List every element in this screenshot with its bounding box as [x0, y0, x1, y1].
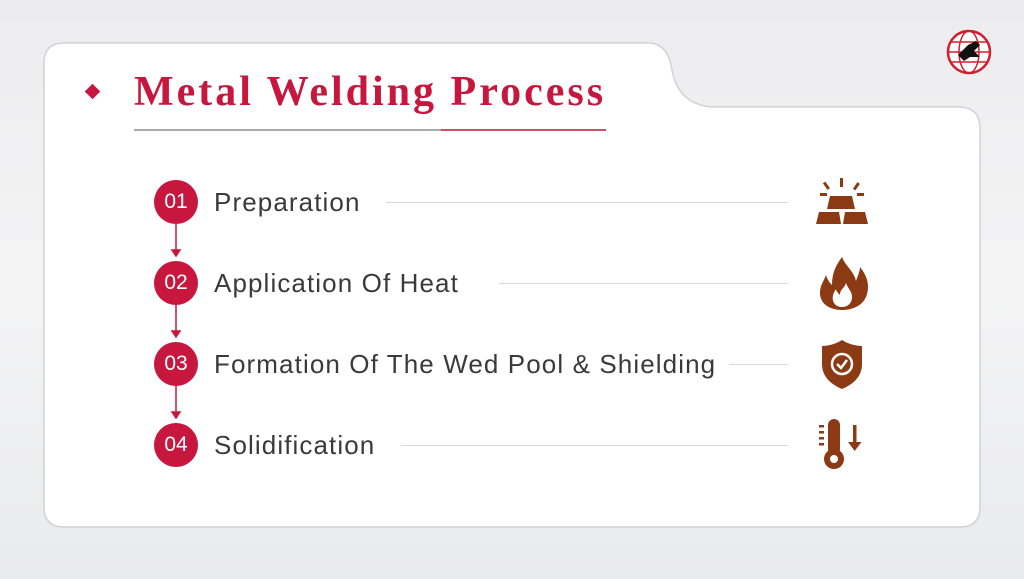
step 01: [154, 180, 788, 224]
icon: diamond bullet: [85, 84, 100, 99]
step 02: [154, 261, 788, 305]
connector arrows: [170, 224, 182, 420]
title underline: [134, 129, 606, 131]
step 03: 03: [164, 352, 188, 375]
step 02: Application Of Heat: [214, 268, 459, 298]
step 04: [154, 423, 788, 467]
icon: thermometer down: [819, 419, 862, 469]
step 01: 01: [164, 190, 188, 213]
title text: Metal Welding Process: [134, 69, 606, 115]
icon: gold bars: [816, 178, 868, 224]
step 04: Solidification: [214, 430, 375, 460]
step 04: 04: [164, 433, 188, 456]
step 01: Preparation: [214, 187, 361, 217]
step 02: 02: [164, 271, 188, 294]
icon: flame: [820, 257, 868, 310]
logo: [946, 30, 992, 74]
title: [84, 69, 606, 131]
step 03: [154, 342, 788, 386]
icon: shield check: [822, 340, 862, 389]
step 03: Formation Of The Wed Pool & Shielding: [214, 349, 716, 379]
